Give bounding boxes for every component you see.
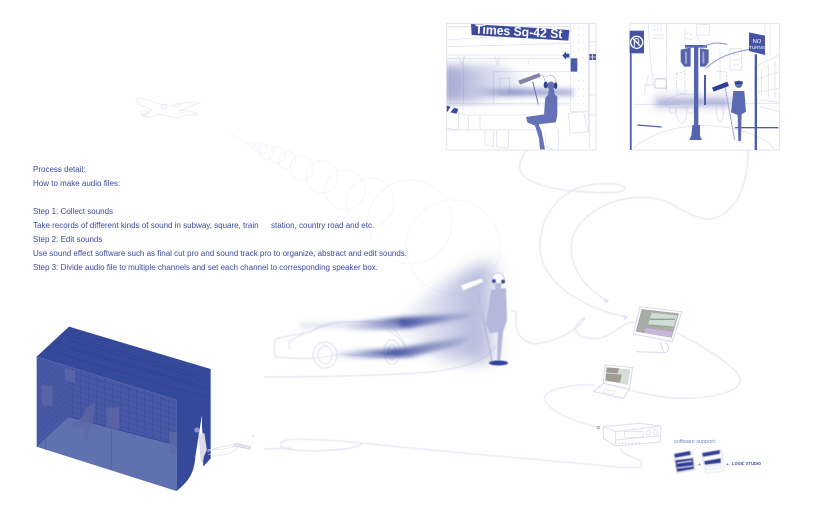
pillar rivets [573, 27, 583, 110]
translucent front face [37, 357, 177, 491]
text block: process detail: Process detail: [33, 165, 85, 174]
standing figure with boom microphone [460, 273, 508, 366]
no u-turn sign [630, 31, 644, 53]
text block: process detail: station, country road and etc. [271, 221, 374, 230]
second plus sign: + [726, 462, 729, 468]
station line drawing [447, 23, 596, 152]
upper sound trail [343, 313, 475, 330]
street posts [630, 53, 778, 150]
fan of light [385, 258, 500, 362]
standing figure with dark microphone [712, 81, 746, 141]
text block: process detail: Use sound effect software such as final cut pro and sound track pro to organize, abstract and edit sounds. [33, 249, 407, 258]
hazard stripes [447, 106, 458, 114]
isometric speaker room [37, 327, 211, 491]
text block: process detail: Take records of different kinds of sound in subway, square, train [33, 221, 259, 230]
speakers and silhouette on walls [42, 368, 177, 454]
panel: subway station recording [443, 22, 596, 152]
no turns sign [749, 32, 765, 55]
audio receiver [597, 423, 661, 446]
software support label: software support: [674, 439, 717, 445]
text block: process detail: Step 1: Collect sounds [33, 207, 113, 216]
lower sound trail [333, 336, 470, 358]
sound wave rings [228, 132, 500, 294]
station name sign: Times Sq-42 St [475, 22, 564, 41]
floor [37, 417, 177, 491]
icon: faint airplane [136, 98, 201, 118]
sound haze [443, 65, 527, 102]
back wall bricks [69, 367, 177, 445]
left wall bricks [37, 357, 69, 447]
street haze [657, 100, 728, 105]
car with sound trails [274, 258, 500, 368]
clapboard icon: sound track [702, 450, 724, 473]
lamp post [681, 45, 709, 140]
connecting audio cables [264, 140, 748, 468]
exit signs [571, 54, 596, 72]
no turns sign: TURNS [749, 45, 765, 50]
text block: process detail [33, 165, 407, 272]
street line drawing [633, 23, 779, 150]
roof lines [45, 334, 210, 398]
small figure with microphone beside room [194, 415, 254, 470]
logic studio label: LOGIC STUDIO [732, 461, 761, 466]
plus sign: + [698, 462, 701, 468]
text block: process detail: Step 3: Divide audio file to multiple channels and set each channel to corresponding speaker box. [33, 263, 378, 272]
arrow sign [562, 52, 569, 60]
room top and right walls [37, 327, 211, 491]
seated figure with boom microphone [518, 73, 557, 149]
no turns sign: NO [753, 39, 762, 45]
laptop [593, 365, 633, 398]
sign panel [655, 79, 666, 88]
panel: times square recording [630, 23, 779, 150]
clapboard icon: final cut [674, 451, 695, 473]
car outline [274, 321, 405, 368]
text block: process detail: Step 2: Edit sounds [33, 235, 102, 244]
text block: process detail: How to make audio files: [33, 179, 120, 188]
software support [674, 439, 761, 473]
iMac monitor [633, 307, 682, 353]
